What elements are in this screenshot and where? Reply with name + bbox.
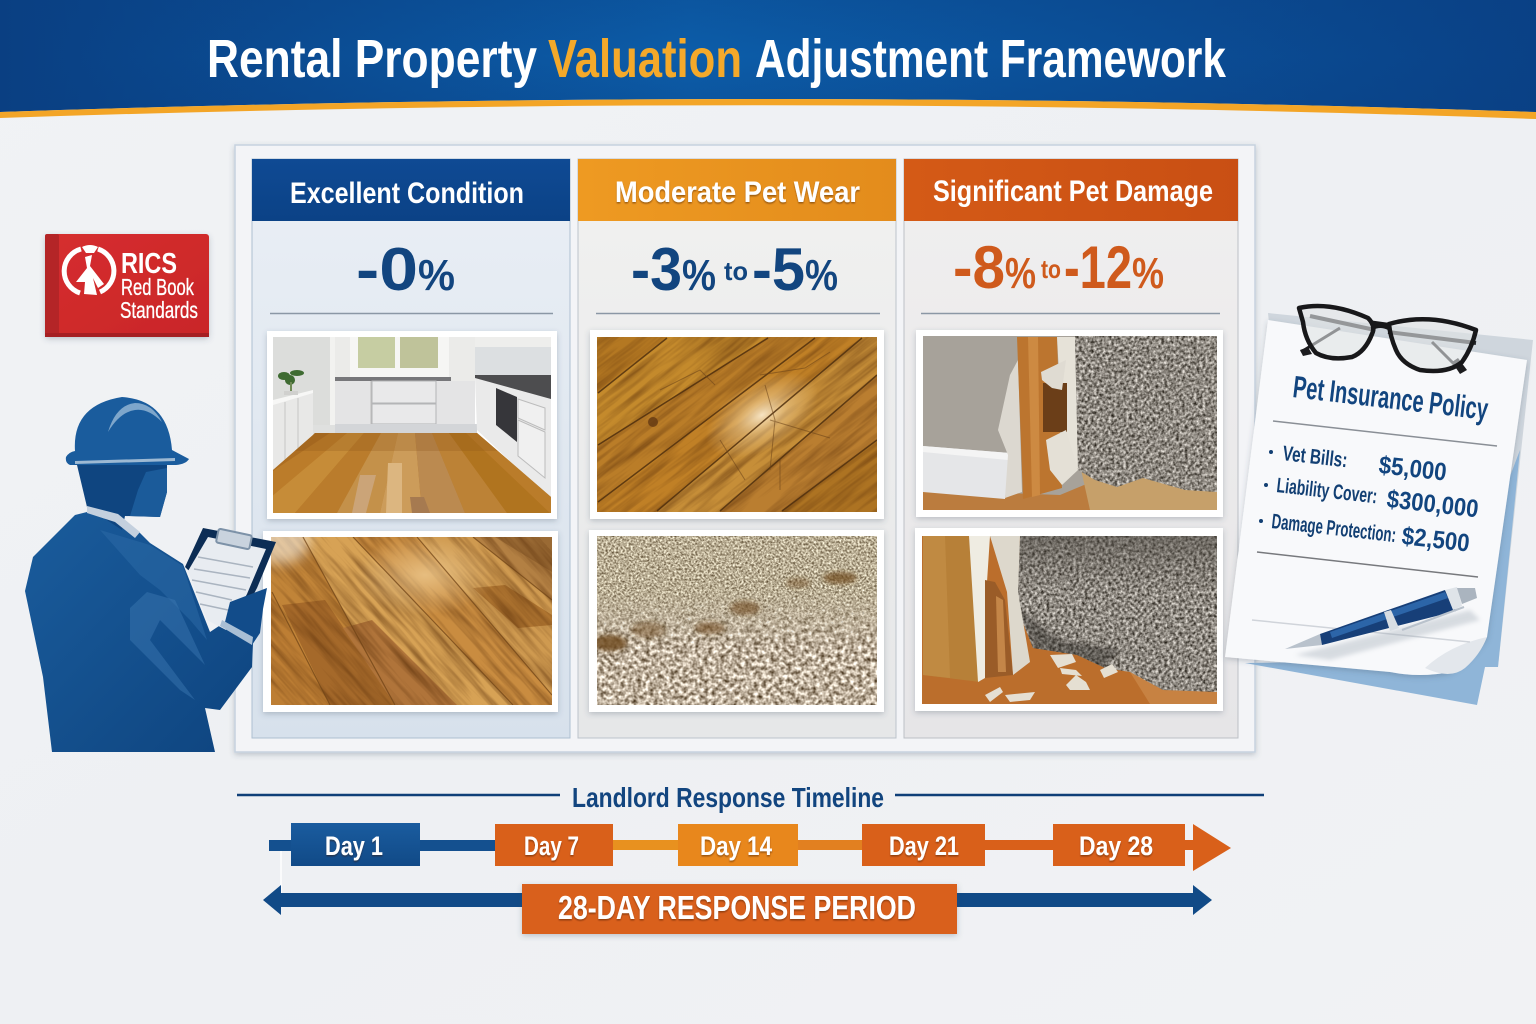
back sheet: blue [1245, 450, 1520, 705]
badge: RICS Red Book Standards: Red Book [121, 274, 194, 300]
policy row: liability cover: Liability Cover: [1275, 474, 1378, 508]
milestone: Day 14: Day 14 [700, 831, 772, 861]
title: Rental Property [207, 29, 537, 89]
milestone: Day 1 [291, 823, 420, 866]
column: significant pet damage [904, 159, 1238, 738]
title: Valuation [548, 29, 742, 89]
adjustment value: -3% to -5%: -5 [752, 236, 805, 303]
header banner [0, 0, 1536, 119]
adjustment value: -0%: -0 [356, 236, 418, 303]
milestone: Day 7 [495, 824, 613, 866]
column heading: moderate pet wear [578, 159, 896, 221]
inspector head [77, 465, 167, 530]
photo: torn carpet and splintered wood [915, 528, 1223, 711]
landlord response timeline [237, 782, 1264, 934]
inspector hand and cuff [225, 588, 267, 645]
photo: chewed door frame beside carpet [916, 330, 1223, 517]
column heading: moderate pet wear: Moderate Pet Wear [615, 176, 860, 209]
timeline track [269, 824, 1231, 871]
adjustment value: -8% to -12%: -12 [1064, 234, 1132, 301]
icon: pen [1285, 587, 1480, 660]
photo: clean kitchen with hardwood floor [264, 330, 560, 524]
policy row: vet bills [1269, 442, 1448, 487]
policy row: damage protection: Damage Protection: [1270, 510, 1397, 547]
banner: 28-day response period: 28-DAY RESPONSE PERIOD [558, 889, 916, 926]
icon: glasses [1299, 306, 1476, 374]
hard hat [66, 397, 189, 465]
double arrow: response period span [263, 885, 1212, 915]
milestone: Day 28: Day 28 [1079, 831, 1153, 861]
photo: scratched hardwood floor [587, 329, 887, 524]
column heading: excellent condition [252, 159, 570, 221]
column heading: significant pet damage [904, 159, 1238, 221]
adjustment value: -0% [356, 236, 455, 303]
back sheet: grey [1268, 313, 1533, 667]
policy row: damage protection: $2,500 [1400, 522, 1471, 558]
adjustment value: -3% to -5% [631, 236, 838, 303]
policy row: vet bills: Vet Bills: [1281, 442, 1349, 472]
milestone: Day 21: Day 21 [889, 831, 959, 861]
milestone: Day 7: Day 7 [524, 831, 579, 861]
framework panel [231, 143, 1259, 758]
adjustment value: -3% to -5%: to [724, 256, 748, 286]
paper sheet [1225, 320, 1527, 675]
badge: RICS Red Book Standards: Standards [120, 297, 198, 323]
clipboard [185, 528, 276, 620]
shirt collar [87, 506, 140, 538]
photo: hardwood floor close-up [260, 530, 561, 717]
title: Adjustment Framework [755, 29, 1227, 89]
adjustment value: -0%: % [418, 251, 455, 300]
column: moderate pet wear [578, 158, 896, 738]
badge: RICS Red Book Standards [45, 234, 209, 337]
pet insurance policy note [1225, 306, 1533, 705]
adjustment value: -3% to -5%: -3 [631, 236, 682, 303]
icon: RICS crest [64, 245, 114, 295]
adjustment value: -8% to -12%: to [1041, 254, 1061, 284]
milestone: Day 21 [862, 824, 985, 866]
policy row: liability cover: $300,000 [1385, 485, 1480, 523]
adjustment value: -8% to -12%: % [1132, 249, 1164, 298]
adjustment value: -8% to -12%: % [1005, 249, 1036, 298]
figure: property inspector with clipboard [25, 397, 276, 752]
milestone: Day 1: Day 1 [325, 831, 383, 861]
banner: 28-day response period [522, 884, 957, 934]
adjustment value: -3% to -5%: % [805, 251, 838, 300]
column: excellent condition [252, 158, 570, 738]
badge: RICS Red Book Standards: RICS [121, 248, 177, 280]
adjustment value: -8% to -12% [953, 234, 1164, 301]
column heading: significant pet damage: Significant Pet Damage [933, 175, 1213, 208]
milestone: Day 14 [678, 824, 798, 866]
photo: stained carpet [589, 530, 884, 712]
adjustment value: -3% to -5%: % [682, 251, 716, 300]
inspector body [25, 512, 253, 752]
policy row: vet bills: $5,000 [1377, 451, 1448, 487]
column heading: excellent condition: Excellent Condition [290, 177, 524, 210]
milestone: Day 28 [1053, 824, 1185, 866]
policy row: liability cover [1264, 474, 1480, 523]
adjustment value: -8% to -12%: -8 [953, 234, 1005, 301]
timeline heading: Landlord Response Timeline [572, 782, 884, 813]
